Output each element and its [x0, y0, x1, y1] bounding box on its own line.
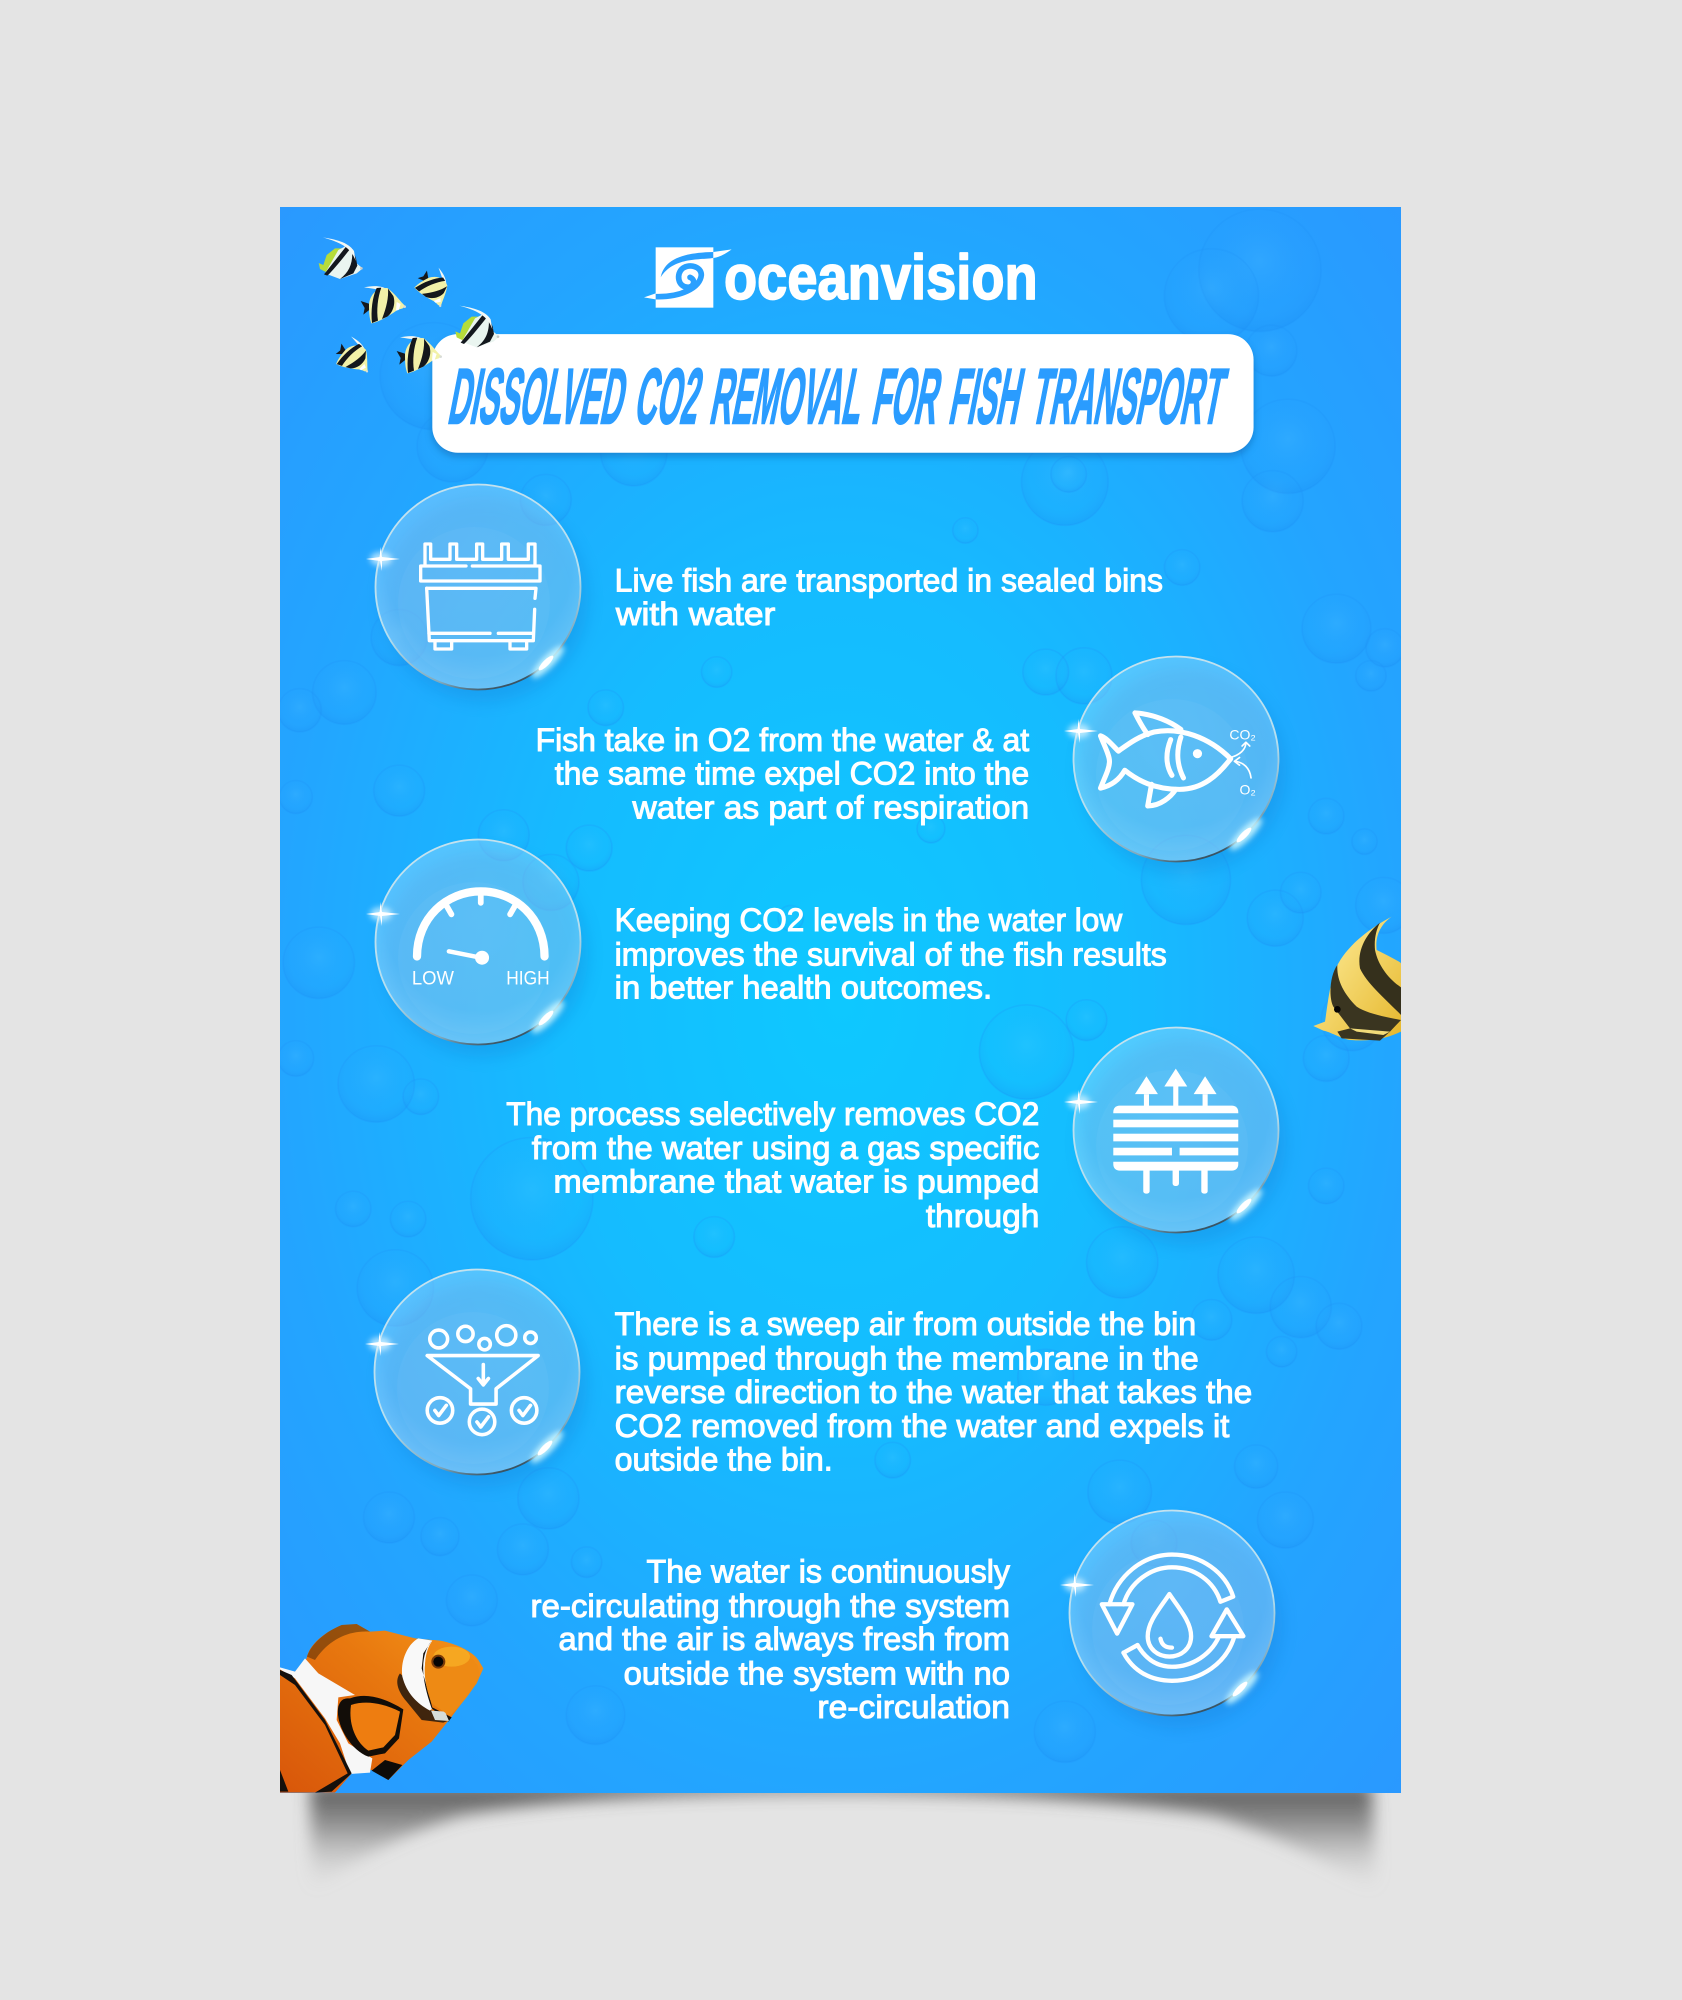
- step 6 text: re-circulating through the system: [531, 1588, 1010, 1624]
- step 5 text: CO2 removed from the water and expels it: [615, 1408, 1229, 1444]
- step 1 text: with water: [615, 596, 776, 632]
- step 4 text: from the water using a gas specific: [532, 1130, 1039, 1166]
- butterfly fish: [1313, 917, 1401, 1041]
- step 5 text: There is a sweep air from outside the bin: [615, 1306, 1196, 1342]
- step 6 text: and the air is always fresh from: [559, 1621, 1010, 1657]
- bubble 1: [366, 484, 588, 702]
- icon: sealed bin: [421, 544, 540, 649]
- step 4 text: membrane that water is pumped: [553, 1163, 1039, 1199]
- icon: water recirculation: [1102, 1555, 1243, 1681]
- step 4 text: through: [926, 1198, 1039, 1234]
- step 5 text: [615, 1306, 1252, 1477]
- step 1 text: Live fish are transported in sealed bins: [615, 563, 1163, 599]
- step 3 text: Keeping CO2 levels in the water low: [615, 902, 1123, 938]
- glass bubble items: [366, 484, 588, 702]
- step 2 text: the same time expel CO2 into the: [555, 755, 1029, 791]
- bubble 2: [1064, 656, 1286, 874]
- icon: gauge low high: LOW: [412, 967, 454, 989]
- step 5 text: outside the bin.: [615, 1441, 833, 1477]
- school of moorish idol fish: [319, 237, 499, 383]
- step 6 text: The water is continuously: [647, 1554, 1011, 1590]
- step 5 text: reverse direction to the water that takes the: [615, 1374, 1252, 1410]
- logo mark: [644, 247, 732, 308]
- step 1 text: [615, 563, 1163, 632]
- icon: fish with gas exchange: O₂: [1240, 781, 1256, 797]
- icon: fish with gas exchange: [1101, 713, 1256, 806]
- step 3 text: in better health outcomes.: [615, 970, 992, 1006]
- step 3 text: improves the survival of the fish results: [615, 936, 1167, 972]
- step 2 text: Fish take in O2 from the water & at: [536, 722, 1029, 758]
- clownfish: [280, 1624, 483, 1793]
- icon: gauge low high: HIGH: [506, 967, 550, 989]
- step texts: [506, 563, 1252, 1725]
- icon: fish with gas exchange: CO₂: [1229, 727, 1256, 743]
- title banner: [432, 334, 1254, 457]
- bubble 5: [365, 1269, 587, 1487]
- step 2 text: water as part of respiration: [631, 790, 1029, 826]
- icon: gauge low high: [412, 891, 550, 989]
- step 6 text: [531, 1554, 1011, 1725]
- poster background: [280, 207, 1401, 1793]
- step 6 text: re-circulation: [817, 1689, 1010, 1725]
- step 4 text: [506, 1096, 1039, 1234]
- step 5 text: is pumped through the membrane in the: [615, 1341, 1199, 1377]
- bubble 3: [366, 839, 588, 1057]
- step 3 text: [615, 902, 1167, 1006]
- bubble 4: [1064, 1027, 1286, 1245]
- background soap bubbles: [278, 209, 1412, 1762]
- icon: funnel filter: [427, 1326, 538, 1435]
- icon: gas membrane: [1113, 1069, 1238, 1194]
- step 4 text: The process selectively removes CO2: [506, 1096, 1039, 1132]
- step 6 text: outside the system with no: [624, 1656, 1010, 1692]
- logo wordmark: oceanvision: [724, 243, 1038, 313]
- logo: [644, 243, 1038, 313]
- step 2 text: [536, 722, 1029, 826]
- poster shadow: [310, 1785, 1376, 1890]
- bubble 6: [1060, 1510, 1282, 1728]
